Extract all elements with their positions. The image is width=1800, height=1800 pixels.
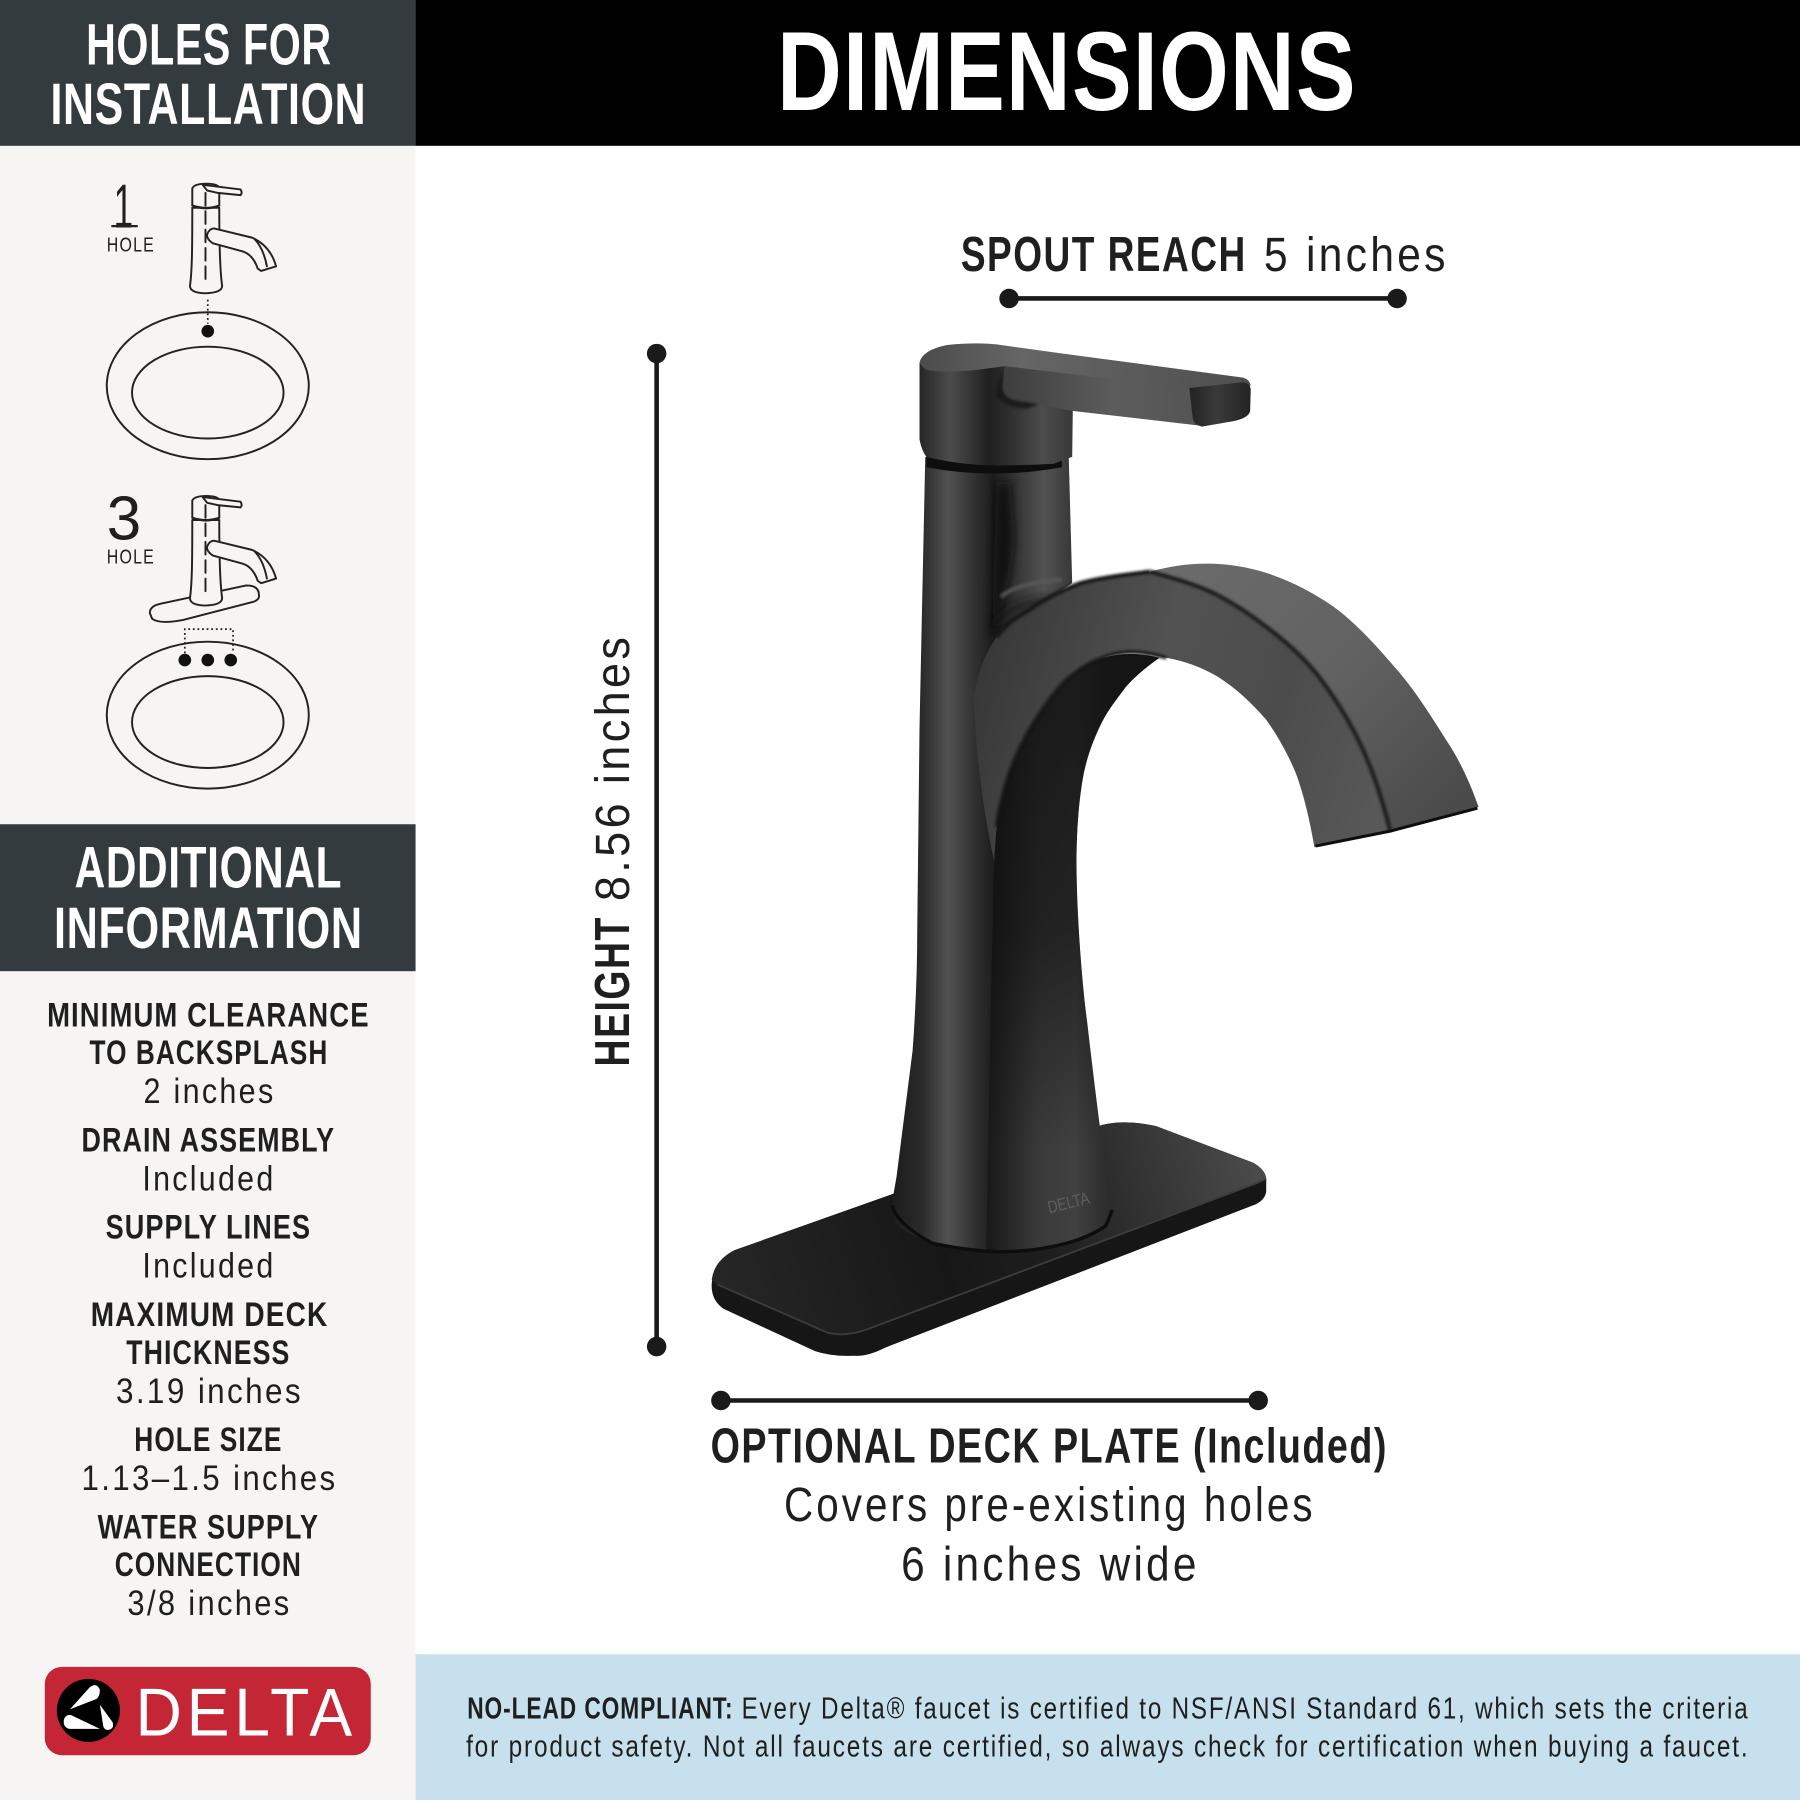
spec: maximum deck thickness: THICKNESS — [126, 1334, 290, 1372]
deck plate — [712, 1122, 1266, 1356]
callout: no-lead compliant — [416, 1654, 1800, 1800]
spec: hole size: HOLE SIZE — [134, 1421, 282, 1459]
sidebar background — [0, 0, 416, 1800]
spec: minimum clearance: MINIMUM CLEARANCE — [47, 996, 370, 1034]
spec: drain assembly: DRAIN ASSEMBLY — [82, 1121, 335, 1159]
spec: water supply connection: WATER SUPPLY — [98, 1508, 319, 1546]
dimension: height: 8.56 inches — [586, 634, 640, 901]
spec: maximum deck thickness — [91, 1296, 328, 1411]
engraved brand mark: DELTA — [1045, 1187, 1092, 1217]
spout — [973, 564, 1479, 861]
spec: drain assembly: Included — [142, 1158, 276, 1198]
spec: minimum clearance: TO BACKSPLASH — [90, 1034, 328, 1072]
cap and lever handle — [920, 343, 1251, 474]
spec: drain assembly — [82, 1121, 335, 1198]
callout: no-lead compliant: NO-LEAD COMPLIANT: — [467, 1690, 734, 1725]
spec: hole size: 1.13–1.5 inches — [82, 1458, 338, 1498]
text block: additional information specs — [47, 996, 370, 1623]
spec: water supply connection — [98, 1508, 319, 1623]
heading: holes for installation — [0, 0, 416, 146]
spec: hole size — [82, 1421, 338, 1498]
dimension: height: HEIGHT — [585, 916, 640, 1066]
spec: minimum clearance — [47, 996, 370, 1111]
spec: maximum deck thickness: MAXIMUM DECK — [91, 1296, 328, 1334]
spec: supply lines: SUPPLY LINES — [106, 1209, 311, 1247]
spec: water supply connection: 3/8 inches — [127, 1583, 292, 1623]
heading: additional information — [0, 824, 416, 971]
dimension: optional deck plate — [711, 1391, 1388, 1592]
diagram: 3 hole installation: HOLE — [107, 546, 155, 569]
title banner: dimensions — [416, 0, 1800, 146]
dimension: spout reach: SPOUT REACH — [961, 227, 1247, 282]
logo: Delta: DELTA — [135, 1676, 357, 1751]
spec: water supply connection: CONNECTION — [115, 1546, 302, 1584]
dimension: optional deck plate: OPTIONAL DECK PLATE (Included) — [711, 1419, 1388, 1474]
dimension: spout reach — [961, 227, 1449, 308]
title banner: dimensions: DIMENSIONS — [777, 8, 1357, 134]
spec: maximum deck thickness: 3.19 inches — [116, 1371, 303, 1411]
spec: supply lines — [106, 1209, 311, 1286]
product photo: faucet — [712, 343, 1479, 1356]
faucet body — [892, 457, 1159, 1252]
dimension: height — [585, 344, 666, 1356]
diagram: 3 hole installation — [107, 485, 309, 789]
dimension: spout reach: 5 inches — [1264, 228, 1449, 282]
heading: additional information: ADDITIONAL — [75, 835, 342, 900]
spec: supply lines: Included — [142, 1246, 276, 1286]
logo: Delta — [45, 1667, 371, 1755]
diagram: 1 hole installation: HOLE — [107, 233, 155, 256]
diagram: 1 hole installation — [107, 172, 309, 459]
heading: additional information: INFORMATION — [54, 896, 363, 961]
diagram: 1 hole installation: 1 — [114, 172, 133, 241]
heading: holes for installation: INSTALLATION — [51, 72, 366, 137]
diagram: 3 hole installation: 3 — [107, 485, 141, 554]
dimension: optional deck plate: Covers pre-existing holes — [784, 1478, 1316, 1532]
dimension: optional deck plate: 6 inches wide — [901, 1538, 1200, 1592]
spec: minimum clearance: 2 inches — [143, 1071, 276, 1111]
heading: holes for installation: HOLES FOR — [86, 12, 332, 77]
